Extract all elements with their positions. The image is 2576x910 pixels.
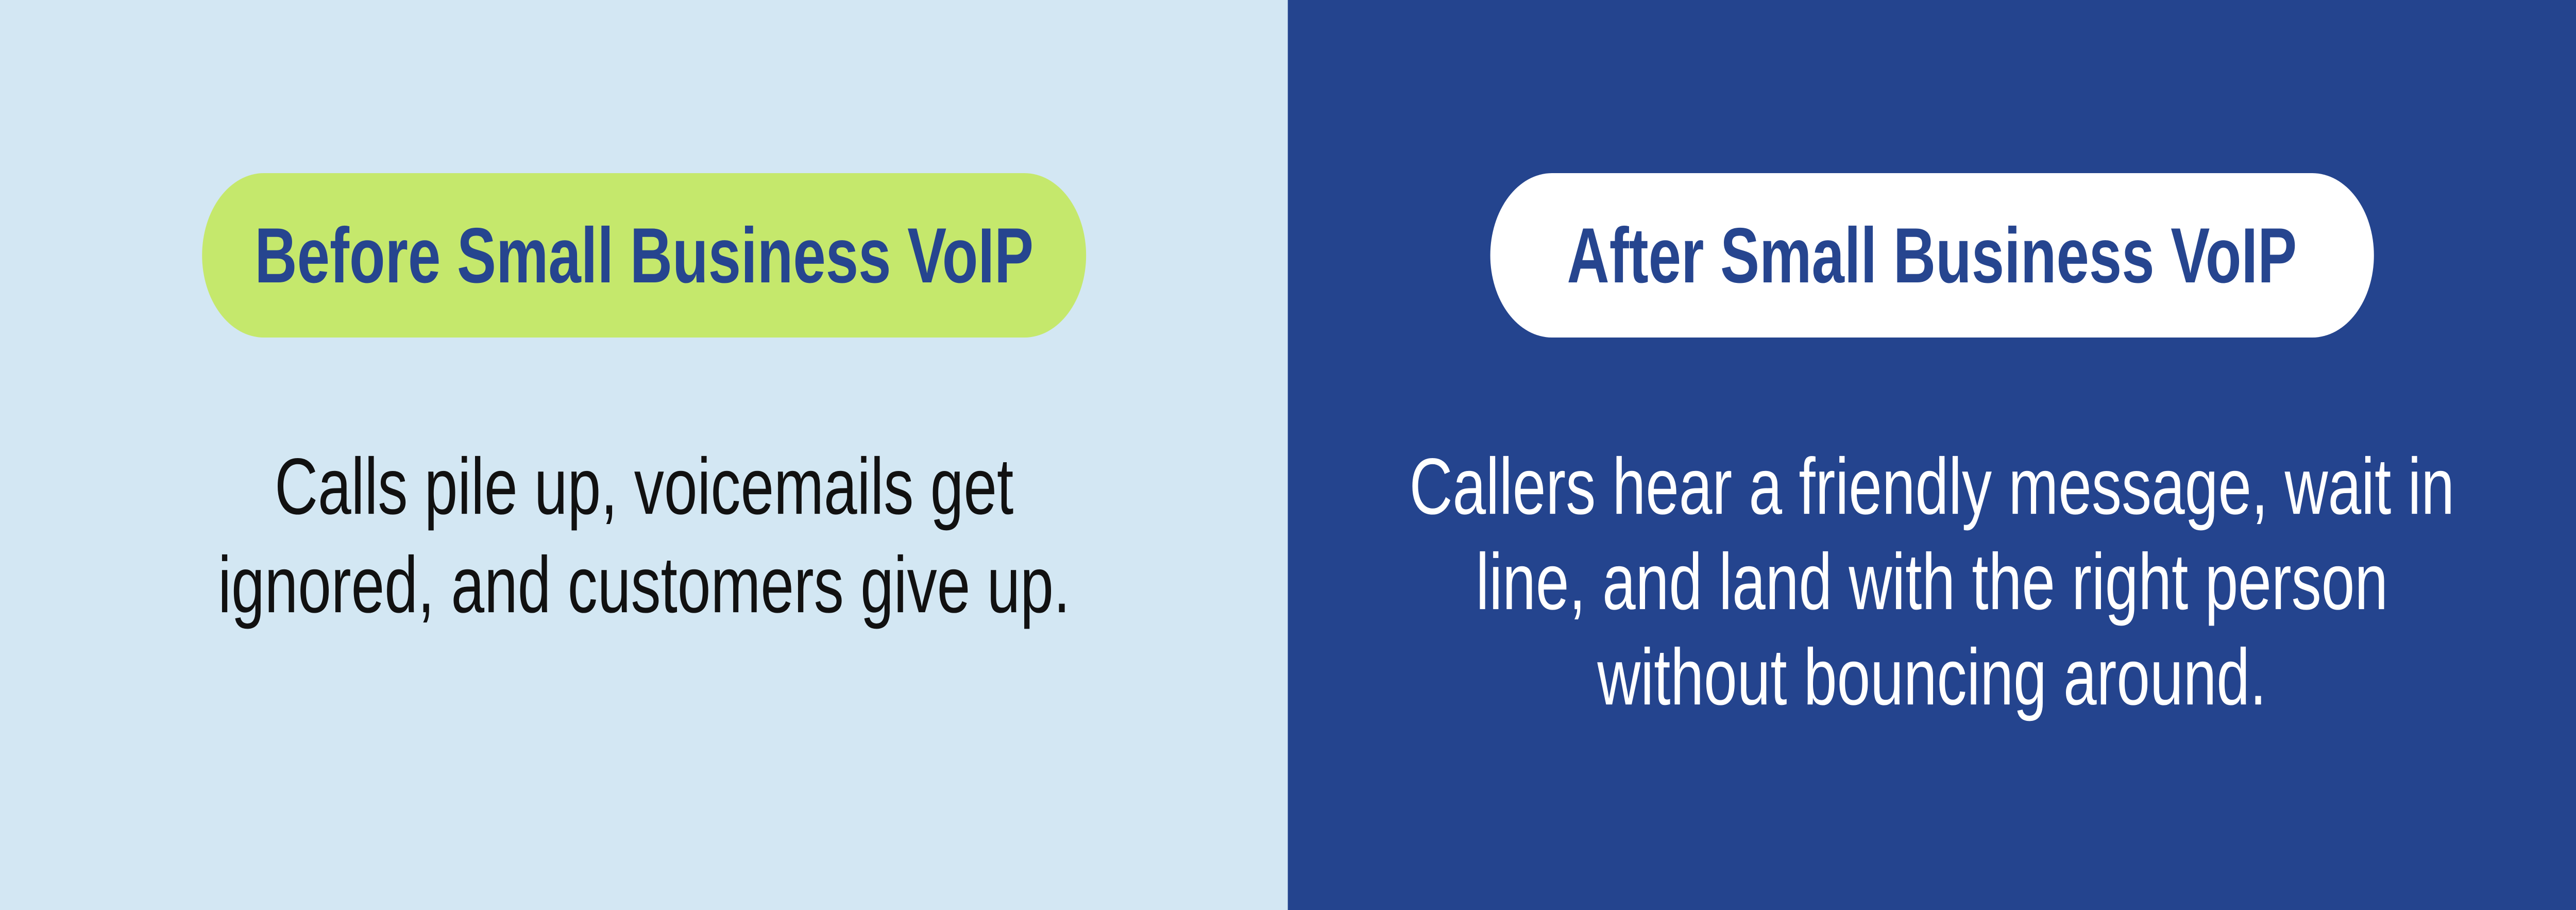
- heading pill: before: [202, 173, 1086, 338]
- text block: before description: Calls pile up, voicemails get: [275, 442, 1013, 531]
- heading pill: before: Before Small Business VoIP: [255, 212, 1033, 299]
- panel: before: [0, 0, 1288, 910]
- text block: after description: without bouncing around.: [1597, 632, 2266, 722]
- text block: after description: Callers hear a friendly message, wait in: [1410, 442, 2454, 531]
- heading pill: after: After Small Business VoIP: [1567, 212, 2297, 299]
- text block: before description: ignored, and customers give up.: [218, 540, 1070, 630]
- text block: after description: line, and land with the right person: [1476, 537, 2388, 627]
- panel: after: [1288, 0, 2576, 910]
- heading pill: after: [1490, 173, 2374, 338]
